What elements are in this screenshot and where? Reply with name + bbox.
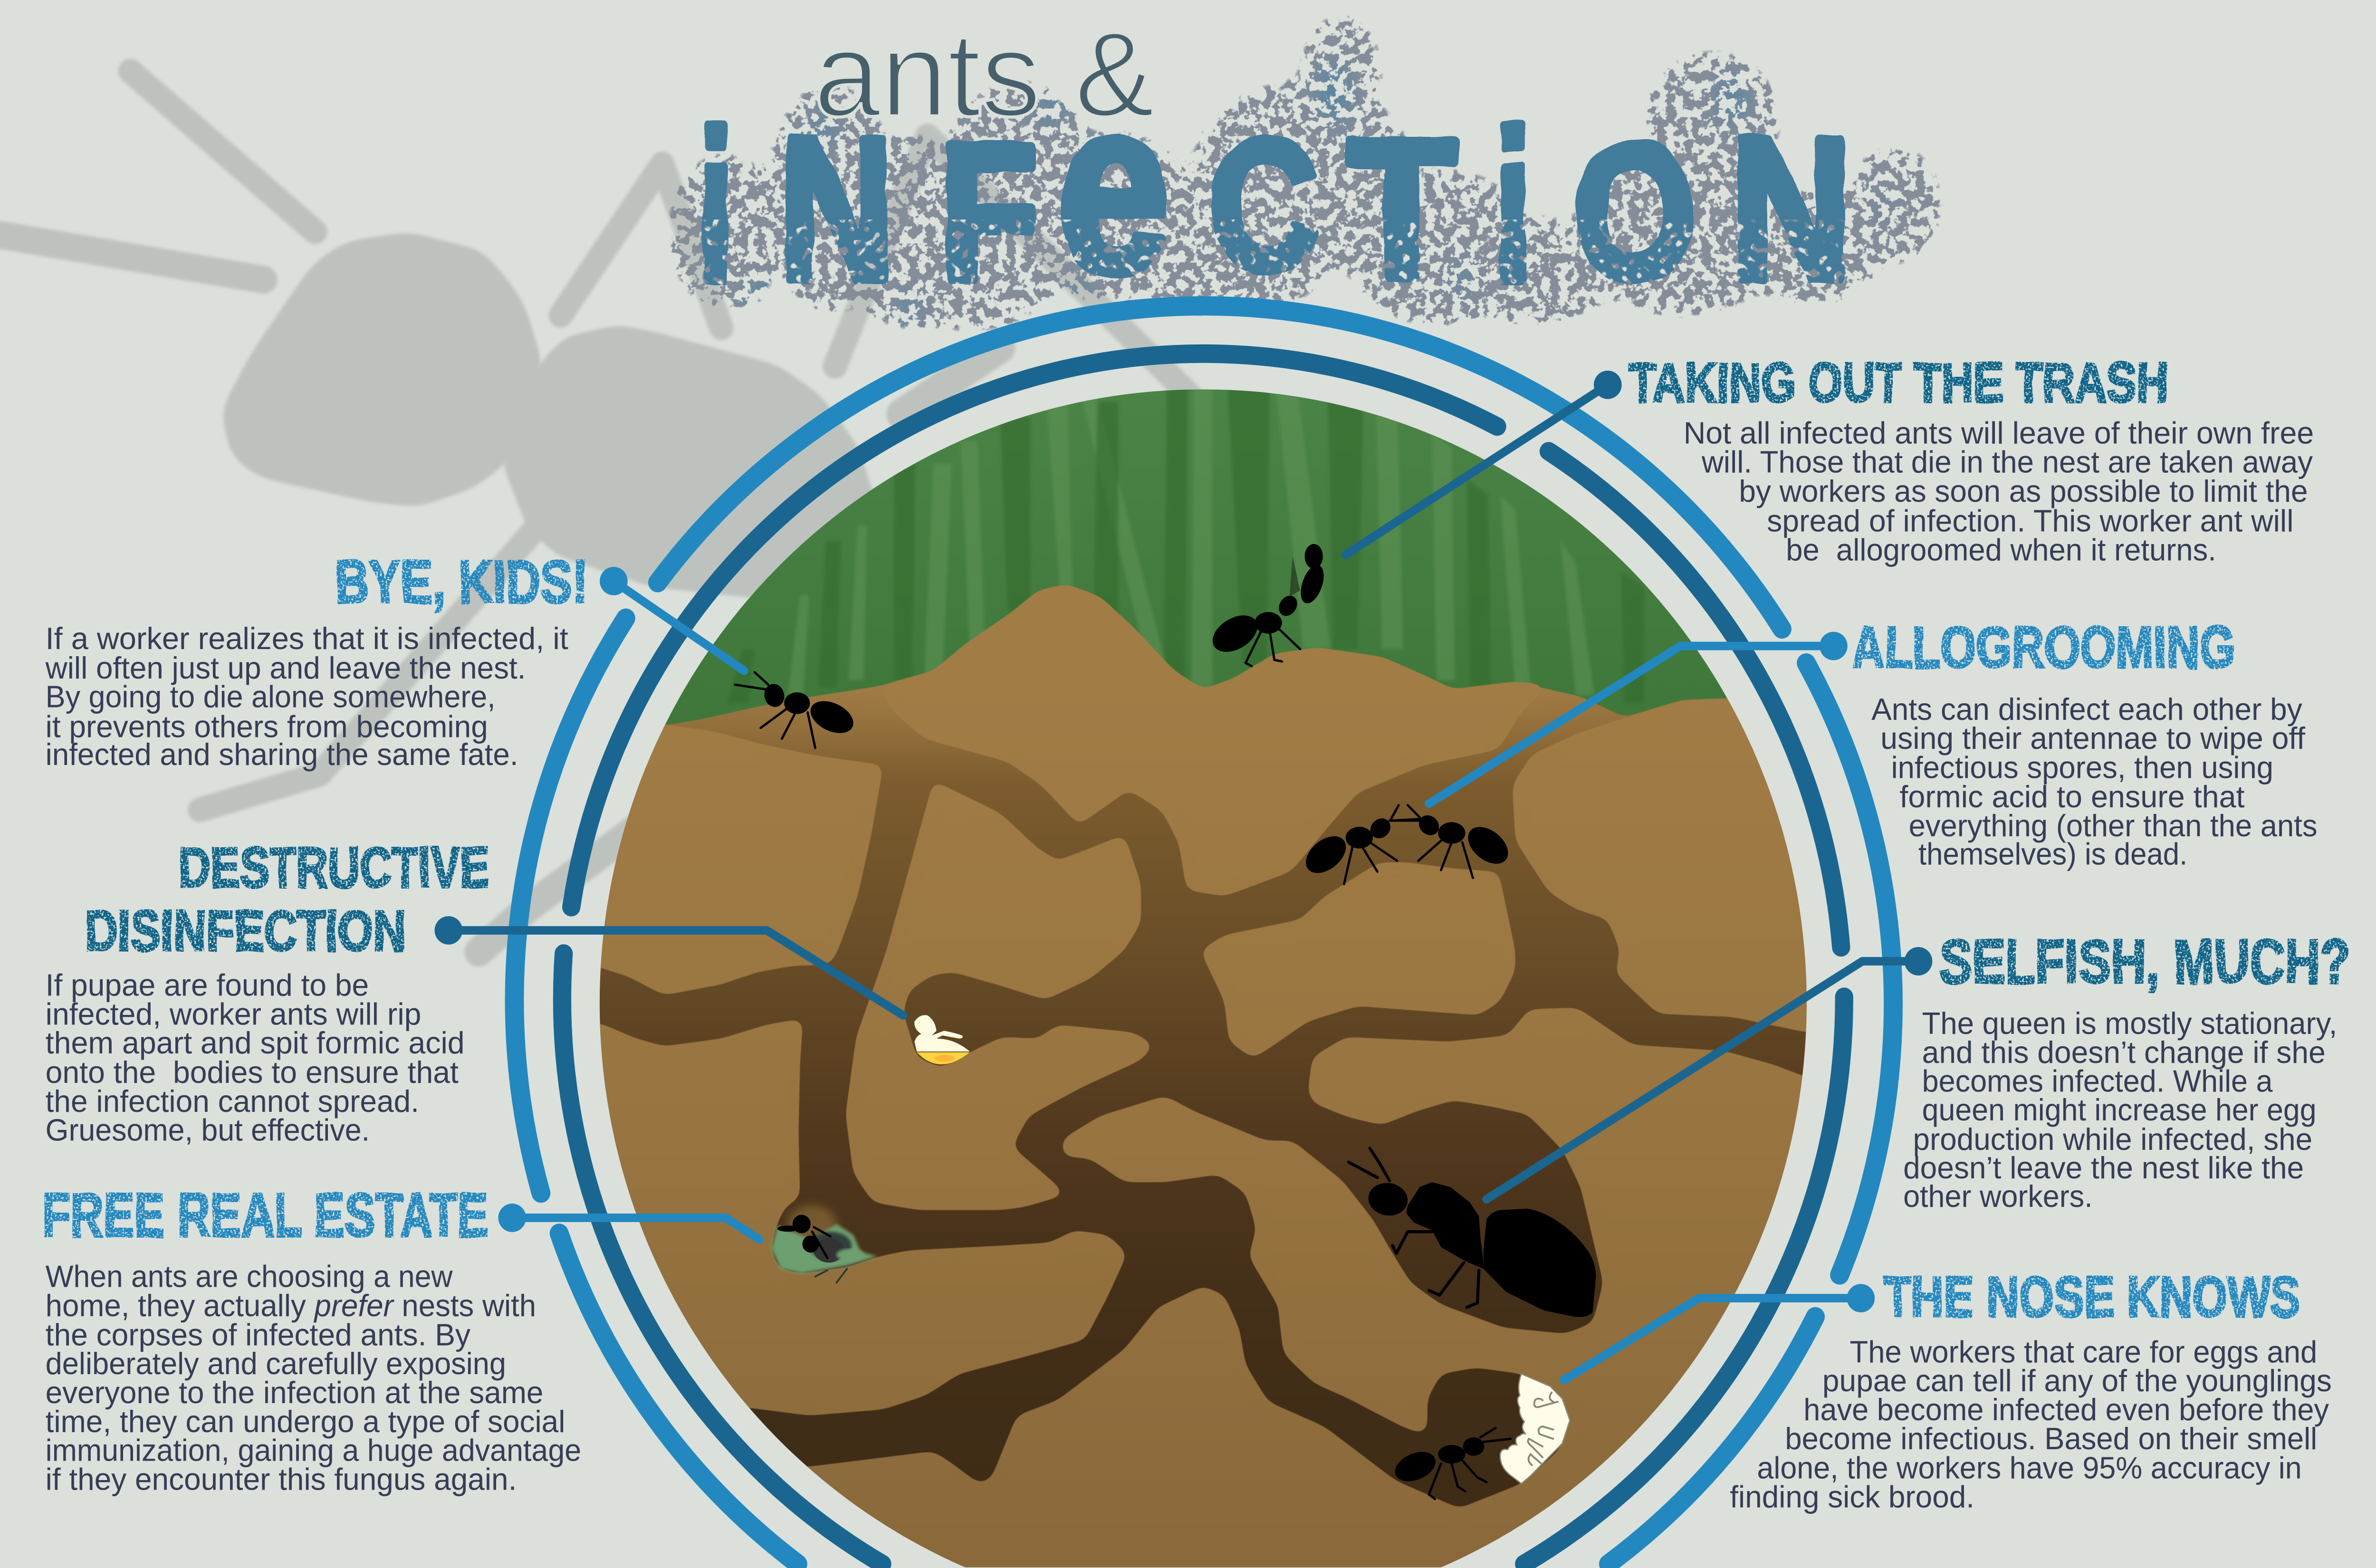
callout: free real estate connector	[498, 1204, 759, 1240]
outer ring segments	[514, 306, 1893, 1564]
text: allogrooming: Ants can disinfect each other by	[1871, 692, 2302, 727]
title: infection: T	[1347, 98, 1456, 321]
title: infection: N	[1731, 96, 1852, 324]
text: destructive disinfection: If pupae are found to be	[46, 968, 369, 1003]
text: the nose knows: alone, the workers have 95% accuracy in	[1757, 1451, 2302, 1485]
chamber glow near infected corpse	[788, 1205, 836, 1243]
nest cross-section circle	[600, 390, 1807, 1568]
heading: bye kids: BYE, KIDS!	[335, 548, 588, 616]
title: infection	[697, 48, 1852, 325]
text: selfish much: other workers.	[1903, 1179, 2093, 1214]
title: infection: i	[1494, 87, 1532, 325]
text: taking out the trash: will. Those that die in the nest are taken away	[1701, 445, 2313, 479]
icon: infected fungal corpse	[771, 1214, 877, 1283]
text: destructive disinfection: Gruesome, but effective.	[46, 1113, 370, 1147]
text: selfish much: doesn’t leave the nest like the	[1903, 1150, 2304, 1185]
title: infection: C	[1209, 101, 1318, 308]
text: free real estate: if they encounter this fungus again.	[46, 1462, 517, 1497]
text: bye kids: By going to die alone somewhere,	[46, 679, 496, 714]
text: selfish much: production while infected, she	[1913, 1122, 2312, 1157]
inner ring segments	[562, 354, 1844, 1564]
text: allogrooming: everything (other than the ants	[1909, 808, 2318, 843]
title: infection: i	[697, 87, 733, 325]
ant: carrying corpse	[1207, 544, 1328, 666]
title: ants &: ants &	[814, 8, 1155, 142]
text: free real estate: deliberately and carefully exposing	[46, 1347, 506, 1381]
tunnels base	[600, 585, 1807, 1568]
text: free real estate: immunization, gaining a huge advantage	[46, 1433, 581, 1468]
callout: bye kids connector	[600, 567, 744, 671]
ghost ant silhouette	[221, 232, 879, 606]
text: allogrooming: themselves) is dead.	[1918, 837, 2187, 871]
callout: destructive disinfection connector	[435, 916, 903, 1015]
text: taking out the trash: by workers as soon as possible to limit the	[1739, 474, 2308, 508]
heading: destructive disinfection: DISINFECTION	[85, 899, 406, 963]
text: free real estate: When ants are choosing a new	[46, 1259, 453, 1294]
text: allogrooming: formic acid to ensure that	[1899, 779, 2245, 814]
title: infection: F	[939, 104, 1038, 321]
text: free real estate: the corpses of infected ants. By	[46, 1318, 471, 1352]
text: bye kids	[45, 621, 568, 772]
text: free real estate: time, they can undergo a type of social	[46, 1404, 565, 1439]
title: infection: e	[1058, 48, 1170, 325]
text: free real estate: everyone to the infection at the same	[46, 1375, 543, 1410]
text: destructive disinfection: them apart and spit formic acid	[46, 1026, 465, 1060]
heading: free real estate: FREE REAL ESTATE	[42, 1181, 488, 1250]
text: allogrooming: infectious spores, then using	[1891, 750, 2273, 784]
text: taking out the trash: be allogroomed when it returns.	[1786, 533, 2216, 567]
ants: allogrooming pair	[1299, 805, 1515, 884]
text: taking out the trash	[1684, 416, 2314, 567]
callout: nose knows connector	[1564, 1284, 1875, 1380]
grass	[653, 390, 1753, 750]
text: allogrooming: using their antennae to wipe off	[1880, 721, 2305, 755]
text: free real estate: home, they actually prefer nests with	[46, 1289, 536, 1323]
text: the nose knows: become infectious. Based on their smell	[1785, 1421, 2317, 1456]
text: allogrooming	[1871, 692, 2318, 871]
text: bye kids: If a worker realizes that it is infected, it	[46, 621, 568, 656]
text: the nose knows: have become infected even before they	[1803, 1392, 2329, 1427]
text: destructive disinfection: infected, worker ants will rip	[46, 997, 421, 1032]
icon: eggs and larvae brood pile	[1500, 1374, 1570, 1483]
callout: allogrooming connector	[1429, 632, 1848, 803]
text: destructive disinfection	[46, 968, 465, 1147]
title: infection: N	[779, 96, 894, 324]
text: bye kids: will often just up and leave the nest.	[45, 650, 526, 685]
text: selfish much: and this doesn’t change if she	[1922, 1035, 2326, 1070]
callout: taking out the trash connector	[1346, 371, 1622, 555]
ant: queen	[1349, 1148, 1596, 1317]
ant: leaving nest	[735, 672, 858, 748]
text: destructive disinfection: onto the bodies to ensure that	[46, 1055, 459, 1090]
heading: destructive disinfection: DESTRUCTIVE	[179, 836, 489, 899]
callout: selfish much connector	[1486, 947, 1932, 1199]
text: selfish much	[1903, 1006, 2337, 1214]
text: bye kids: infected and sharing the same fate.	[46, 737, 518, 772]
ghost ant legs and antennae	[0, 71, 1212, 952]
text: selfish much: The queen is mostly stationary,	[1922, 1006, 2337, 1041]
heading: destructive disinfection	[85, 836, 489, 963]
heading: taking out the trash: TAKING OUT THE TRASH	[1629, 352, 2168, 414]
icon: infected pupa	[914, 1015, 970, 1064]
text: free real estate	[46, 1259, 581, 1497]
text: selfish much: queen might increase her egg	[1922, 1093, 2317, 1127]
text: the nose knows: The workers that care for eggs and	[1850, 1335, 2317, 1369]
text: the nose knows: finding sick brood.	[1730, 1480, 1974, 1514]
soil islands	[600, 585, 1807, 1568]
text: the nose knows	[1730, 1335, 2332, 1514]
text: taking out the trash: spread of infection. This worker ant will	[1767, 504, 2294, 538]
text: selfish much: becomes infected. While a	[1922, 1064, 2273, 1099]
heading: allogrooming: ALLOGROOMING	[1852, 614, 2235, 680]
title: infection: O	[1574, 105, 1696, 319]
text: taking out the trash: Not all infected ants will leave of their own free	[1684, 416, 2314, 450]
rings	[514, 306, 1893, 1564]
text: destructive disinfection: the infection cannot spread.	[46, 1084, 419, 1119]
text: the nose knows: pupae can tell if any of the younglings	[1822, 1363, 2332, 1398]
ant: brood caretaker	[1391, 1428, 1511, 1499]
text: bye kids: it prevents others from becoming	[46, 709, 488, 744]
infection spore cloud behind title	[670, 16, 1940, 329]
